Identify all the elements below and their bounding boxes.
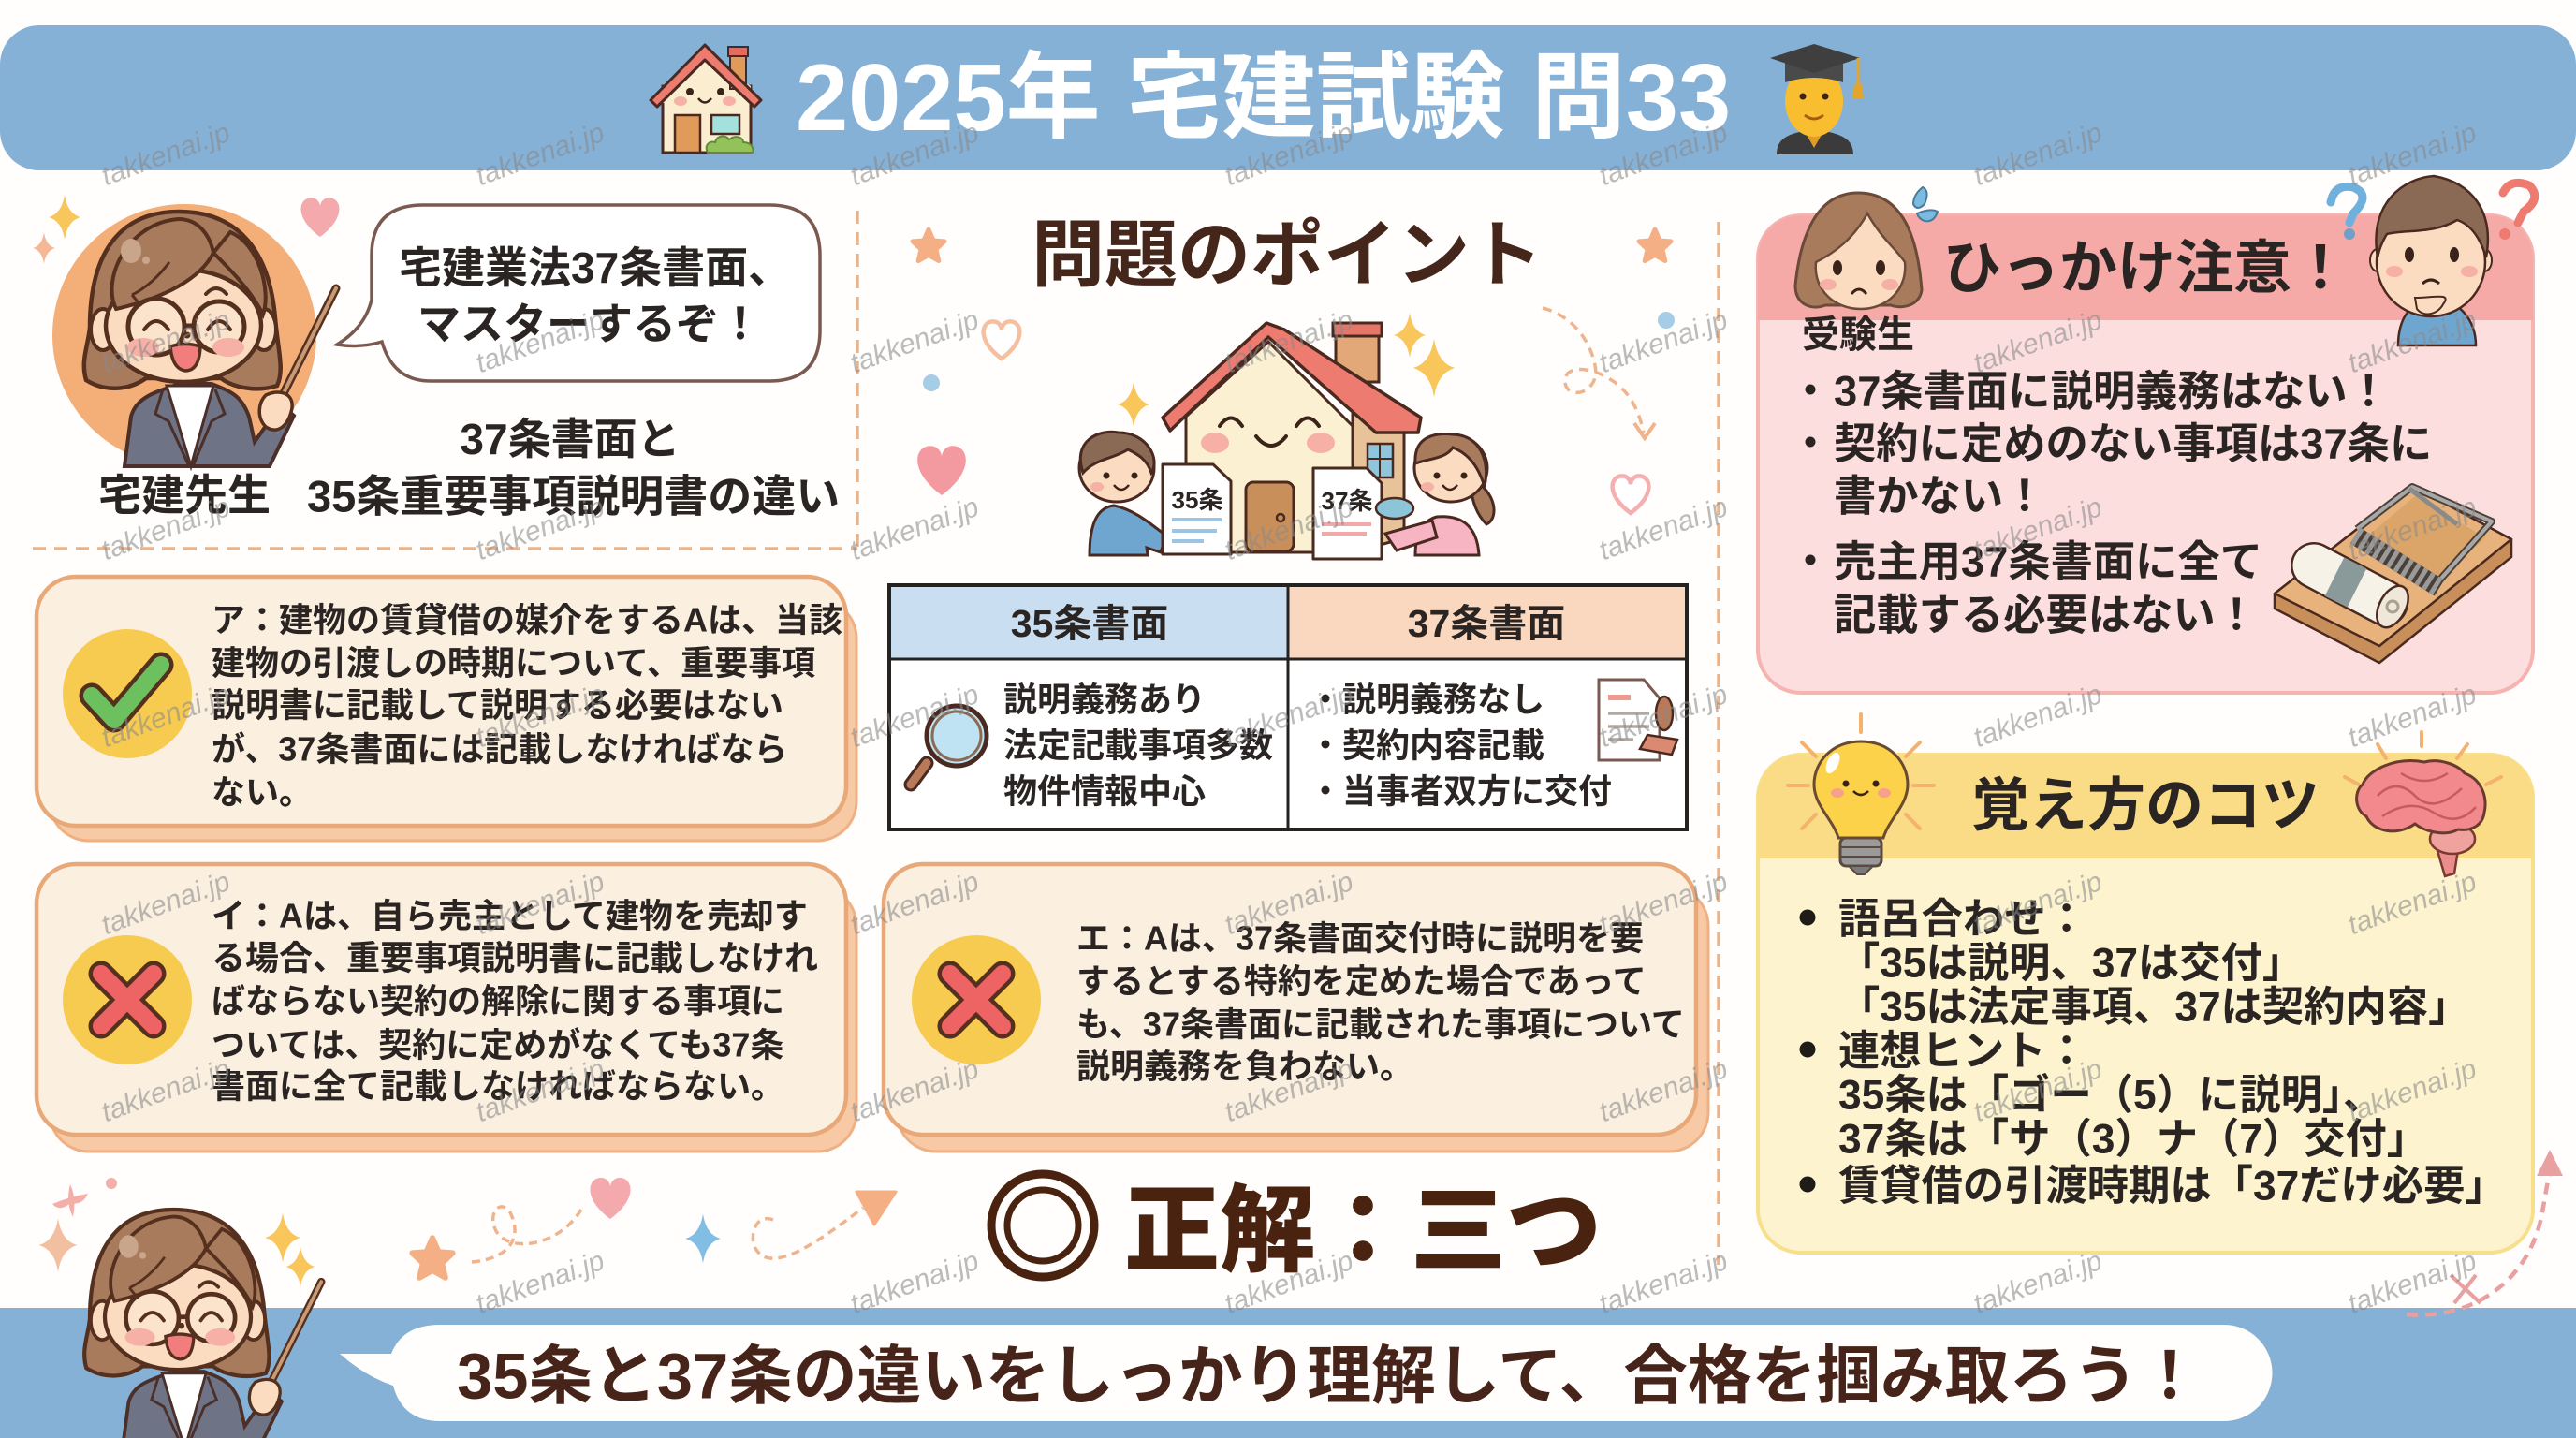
option i text: ばならない契約の解除に関する事項に [212,981,784,1020]
watermarks: takkenai.jp [1969,866,2106,941]
answer text: 正解：三つ [1124,1178,1602,1284]
watermarks: takkenai.jp [97,1053,234,1128]
watermarks: takkenai.jp [2344,1245,2481,1320]
memory tips list [1799,897,2507,1210]
watermarks: takkenai.jp [846,492,983,566]
option e text: するとする特約を定めた場合であって [1076,962,1647,1000]
watermarks: takkenai.jp [1595,304,1732,379]
article 37 points: 契約内容記載 [1342,726,1544,764]
memory tips list: 「35は説明、37は交付」 [1838,940,2304,987]
footer bar [0,1308,2576,1438]
watermarks: takkenai.jp [1595,492,1732,566]
article 35 points: 法定記載事項多数 [1003,726,1273,764]
heading: problem points: 問題のポイント [1032,213,1543,296]
watermarks: takkenai.jp [846,1053,983,1128]
memory tips list: 語呂合わせ： [1838,897,2087,942]
person: boy [1079,432,1166,555]
panel heading: ひっかけ注意！ [1943,236,2349,301]
option a text: 建物の引渡しの時期について、重要事項 [212,644,815,682]
icon: light bulb [1788,714,1934,874]
article 35 points: 物件情報中心 [1003,771,1206,811]
icon: brain [2345,732,2501,876]
tricky points list: 37条書面に説明義務はない！ [1834,367,2390,416]
watermarks: takkenai.jp [97,304,234,379]
watermarks: takkenai.jp [1595,117,1732,192]
dividers [33,211,1719,1265]
person: girl [1385,434,1494,555]
option a text [212,601,842,811]
title: 2025年 宅建試験 問33 [796,46,1731,151]
article 37 points [1322,680,1612,811]
watermarks: takkenai.jp [846,304,983,379]
right dashed arrow [2407,1150,2563,1315]
watermarks: takkenai.jp [97,117,234,192]
option i text: ついては、契約に定めがなくても37条 [212,1026,783,1064]
watermarks: takkenai.jp [1221,1245,1357,1320]
icon: smiling house [651,45,761,153]
watermarks: takkenai.jp [2344,866,2481,941]
speech bubble: 宅建業法37条書面、 [399,243,791,292]
speech bubble: マスターするぞ！ [417,300,762,348]
watermarks: takkenai.jp [2344,679,2481,754]
watermarks: takkenai.jp [1595,1245,1732,1320]
watermarks: takkenai.jp [1221,117,1357,192]
icon: top decorations [33,195,339,264]
icon: check mark [63,629,192,758]
tricky points list: 書かない！ [1834,472,2046,521]
watermarks: takkenai.jp [472,1053,608,1128]
option a text: ア：建物の賃貸借の媒介をするAは、当該 [212,601,842,638]
card: option i [37,864,856,1152]
panel: tricky points [1758,176,2535,693]
card: option a [37,577,856,841]
panel heading: 覚え方のコツ [1971,773,2320,839]
watermarks: takkenai.jp [97,492,234,566]
table heading: article 37: 37条書面 [1408,602,1565,645]
option i text [212,897,818,1105]
speech bubble [337,205,820,381]
option e text [1076,919,1685,1086]
memory tips list: 「35は法定事項、37は契約内容」 [1838,985,2469,1030]
article 37 points: 説明義務なし [1342,680,1544,719]
teacher illustration [52,204,336,466]
icon: worried student boy [2331,176,2535,345]
teacher illustration: footer [84,1210,321,1438]
memory tips list: 35条は「ゴー（5）に説明」、 [1838,1073,2384,1118]
label: student: 受験生 [1802,315,1914,356]
icon: graduate [1770,44,1864,154]
icon: mouse trap [2275,486,2511,663]
document: article 37: 37条 [1322,487,1372,515]
memory tips list: 連想ヒント： [1838,1028,2087,1075]
watermarks: takkenai.jp [1221,866,1357,941]
watermarks: takkenai.jp [2344,1053,2481,1128]
footer speech bubble: 35条と37条の違いをしっかり理解して、合格を掴み取ろう！ [457,1341,2202,1412]
subject label [307,415,840,521]
watermarks: takkenai.jp [1221,679,1357,754]
watermarks: takkenai.jp [846,1245,983,1320]
icon: document and stamp [1599,680,1677,760]
article 37 points: 当事者双方に交付 [1342,771,1612,811]
bottom decorations [39,1178,896,1287]
option e text: 説明義務を負わない。 [1076,1047,1413,1086]
watermarks: takkenai.jp [1221,1053,1357,1128]
option i text: る場合、重要事項説明書に記載しなけれ [212,938,818,977]
house illustration with two people [1079,323,1494,559]
option a text: が、37条書面には記載しなければなら [212,730,787,768]
watermarks: takkenai.jp [1969,1053,2106,1128]
article 35 points [1003,680,1273,811]
icon: cross mark [912,935,1041,1064]
article 35 points: 説明義務あり [1003,680,1206,719]
subject label: 35条重要事項説明書の違い [307,472,840,521]
header banner [0,25,2576,170]
watermarks: takkenai.jp [1969,679,2106,754]
watermarks: takkenai.jp [472,492,608,566]
option i text: 書面に全て記載しなければならない。 [212,1067,784,1105]
watermarks: takkenai.jp [97,866,234,941]
panel: memory tips [1758,714,2533,1253]
watermarks: takkenai.jp [97,679,234,754]
watermarks: takkenai.jp [1595,866,1732,941]
watermarks: takkenai.jp [846,117,983,192]
watermarks: takkenai.jp [1595,679,1732,754]
tricky points list: 売主用37条書面に全て [1834,537,2262,586]
memory tips list: 賃貸借の引渡時期は「37だけ必要」 [1838,1163,2507,1210]
icon: worried student woman [1795,187,1938,309]
memory tips list: 37条は「サ（3）ナ（7）交付」 [1838,1116,2428,1163]
watermarks: takkenai.jp [1969,1245,2106,1320]
watermarks: takkenai.jp [472,304,608,379]
option a text: ない。 [212,773,313,811]
watermarks: takkenai.jp [472,117,608,192]
watermarks: takkenai.jp [1969,117,2106,192]
option a text: 説明書に記載して説明する必要はない [212,685,783,725]
subject label: 37条書面と [460,415,681,463]
watermarks: takkenai.jp [1221,304,1357,379]
watermarks: takkenai.jp [1595,1053,1732,1128]
option e text: も、37条書面に記載された事項について [1076,1005,1685,1043]
watermarks: takkenai.jp [1221,492,1357,566]
table heading: article 35: 35条書面 [1011,602,1168,645]
icon: magnifying glass [911,706,987,785]
watermarks: takkenai.jp [472,866,608,941]
document: article 37 [1313,468,1382,559]
document: article 35 [1163,464,1231,554]
watermarks: takkenai.jp [472,1245,608,1320]
tricky points list [1805,367,2432,638]
watermarks: takkenai.jp [2344,117,2481,192]
option i text: イ：Aは、自ら売主として建物を売却す [212,897,808,934]
comparison table [889,585,1687,829]
icon: center decorations [913,229,1675,513]
footer speech bubble [340,1325,2273,1421]
document: article 35: 35条 [1172,486,1222,514]
watermarks: takkenai.jp [472,679,608,754]
watermarks: takkenai.jp [1969,304,2106,379]
option e text: エ：Aは、37条書面交付時に説明を要 [1076,919,1644,957]
tricky points list: 契約に定めのない事項は37条に [1834,419,2432,468]
tricky points list: 記載する必要はない！ [1834,592,2258,638]
watermarks: takkenai.jp [1969,492,2106,566]
watermarks: takkenai.jp [2344,304,2481,379]
watermarks: takkenai.jp [846,679,983,754]
icon: cross mark [63,935,192,1064]
card: option e [884,864,1708,1152]
answer mark: double circle [991,1174,1094,1277]
watermarks: takkenai.jp [2344,492,2481,566]
watermarks: takkenai.jp [846,866,983,941]
teacher name: 宅建先生 [98,471,271,520]
